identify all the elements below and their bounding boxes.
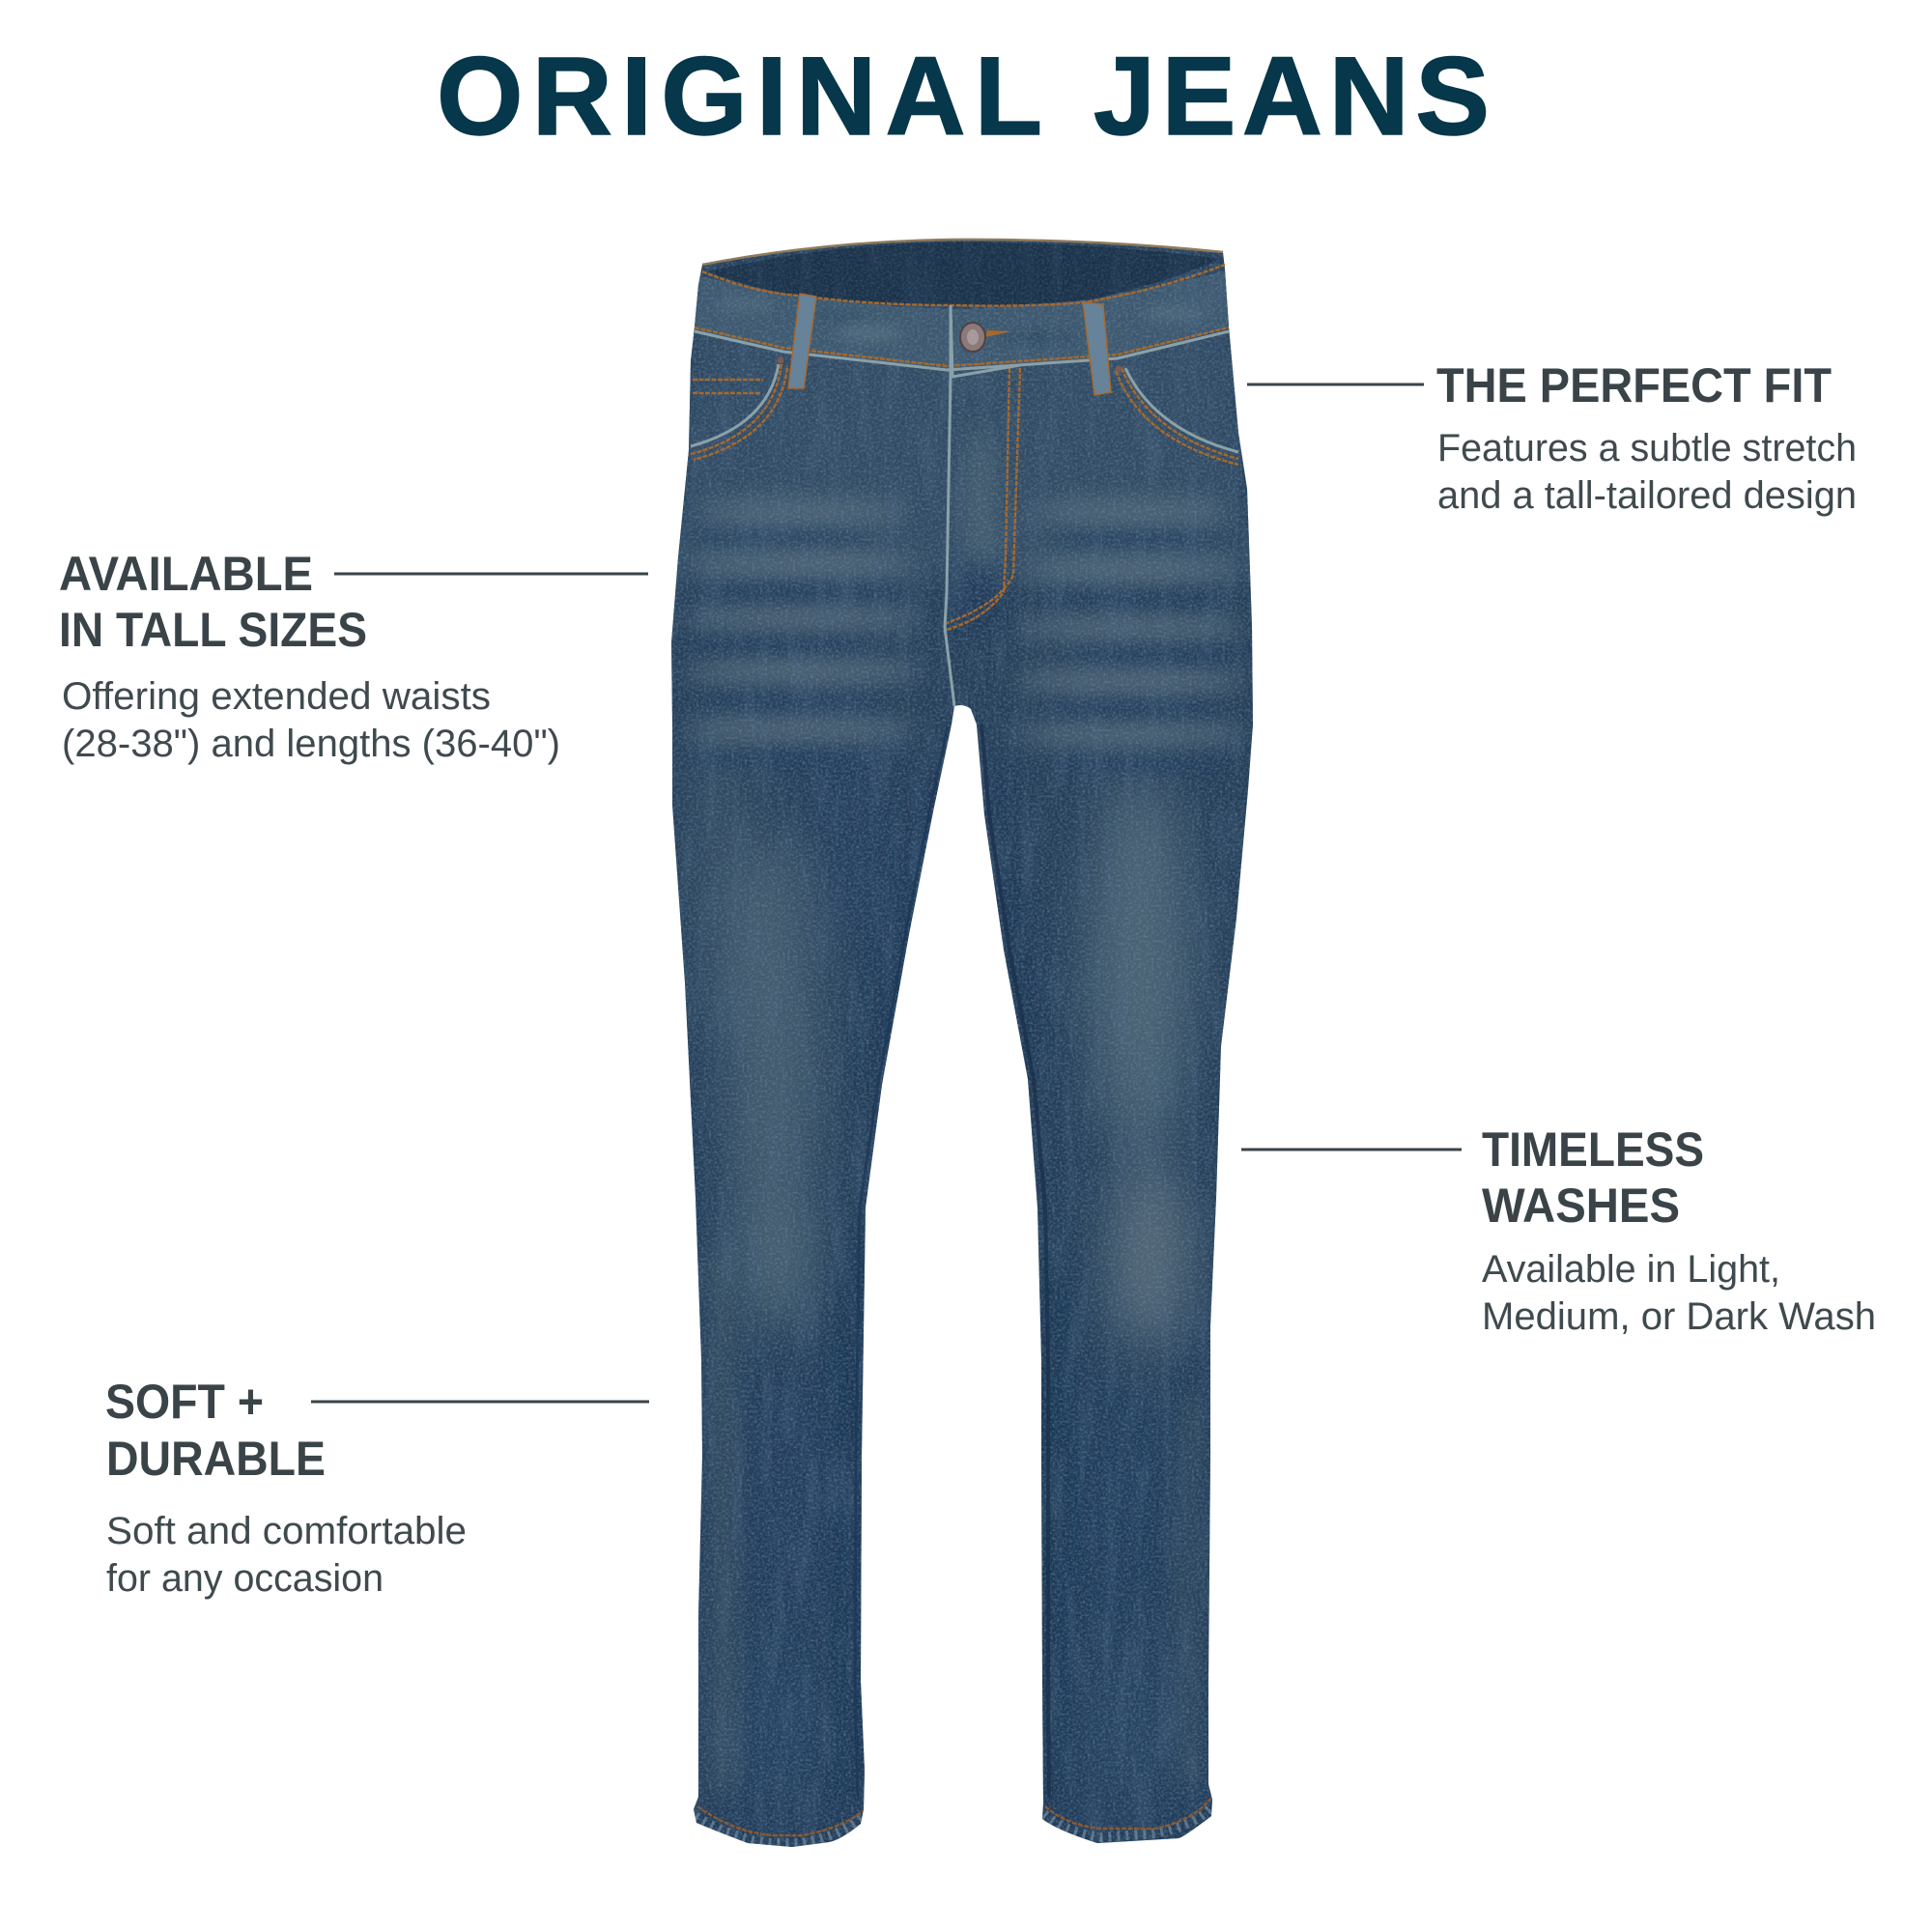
waistband lower seam	[695, 331, 1229, 370]
belt loop left	[788, 294, 816, 388]
side fades	[720, 773, 1193, 1787]
leader line	[1241, 1148, 1462, 1151]
heading	[105, 1375, 326, 1486]
right pocket	[1115, 365, 1238, 465]
callout: timeless washes	[1241, 1122, 1876, 1338]
left hem ribbing	[696, 1816, 862, 1843]
heading: SOFT +	[105, 1375, 264, 1429]
overall darkening	[657, 232, 1275, 1864]
right hem ribbing	[1044, 1808, 1210, 1837]
heading: IN TALL SIZES	[59, 603, 367, 657]
waistband creases	[715, 298, 1207, 345]
description: and a tall-tailored design	[1437, 474, 1857, 517]
leader line	[1247, 383, 1424, 386]
description: Available in Light,	[1482, 1248, 1780, 1291]
heading: WASHES	[1482, 1179, 1680, 1233]
title: JEANS	[1094, 35, 1490, 158]
description: (28-38") and lengths (36-40")	[62, 723, 560, 765]
callout: soft and durable	[105, 1375, 649, 1600]
left pocket	[691, 357, 787, 460]
title	[437, 35, 1490, 158]
leader line	[311, 1401, 649, 1403]
leader line	[334, 572, 648, 576]
heading: AVAILABLE	[59, 547, 313, 601]
description	[62, 675, 560, 765]
description: Medium, or Dark Wash	[1482, 1295, 1876, 1338]
inseam stitches	[855, 726, 948, 1797]
heading: TIMELESS	[1482, 1122, 1704, 1177]
jeans body	[657, 232, 1275, 1864]
heading: THE PERFECT FIT	[1436, 358, 1832, 412]
description: Offering extended waists	[62, 675, 491, 718]
description	[1437, 427, 1857, 517]
fly shading	[965, 425, 996, 599]
heading	[1482, 1122, 1704, 1233]
title: ORIGINAL	[437, 35, 1042, 158]
description	[1482, 1248, 1876, 1338]
belt loop right	[1083, 302, 1111, 395]
fly placket	[945, 305, 954, 706]
waistband inner	[718, 242, 1166, 305]
heading	[59, 547, 367, 657]
callout: the perfect fit	[1247, 358, 1857, 517]
description: Features a subtle stretch	[1437, 427, 1857, 469]
whisker bands	[681, 499, 1246, 748]
waistband inner shadow	[707, 242, 1221, 305]
description	[106, 1510, 467, 1600]
description: for any occasion	[106, 1557, 384, 1600]
right hem stitch	[1045, 1799, 1210, 1829]
left hem stitch	[697, 1806, 863, 1835]
waistband rim stitch	[702, 265, 1225, 306]
description: Soft and comfortable	[106, 1510, 467, 1552]
denim texture	[657, 232, 1275, 1864]
worn fades	[688, 766, 1213, 1368]
jeans illustration	[657, 232, 1275, 1864]
heading: DURABLE	[106, 1432, 326, 1486]
upper hip and waistband tone	[671, 275, 1247, 580]
button	[960, 323, 1011, 352]
callout: available in tall sizes	[59, 547, 648, 765]
